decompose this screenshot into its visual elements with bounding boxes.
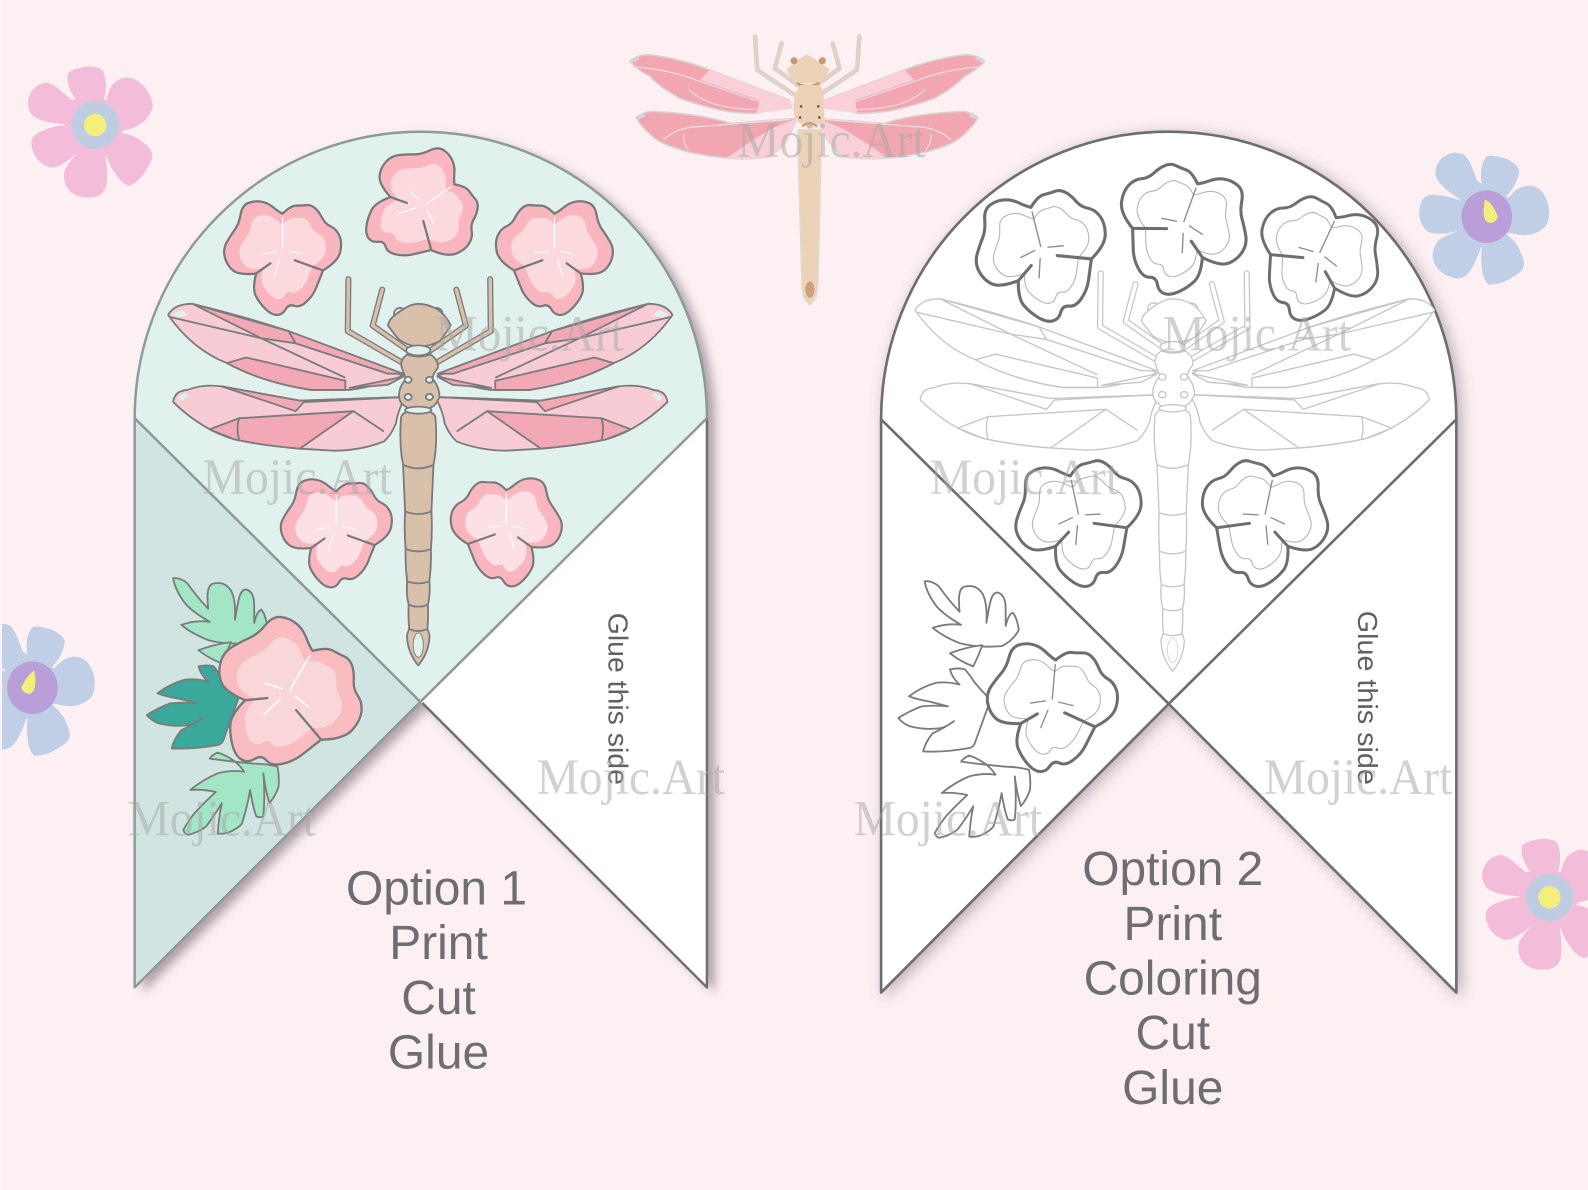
text: option 2 steps: Cut xyxy=(1136,1007,1210,1060)
leaves and flower on left flap xyxy=(147,578,385,835)
watermarks: Mojic.Art xyxy=(128,791,316,847)
watermarks: Mojic.Art xyxy=(203,449,392,505)
icon: pink flower top left xyxy=(28,66,153,197)
right flap upper edge xyxy=(420,418,707,702)
dragonfly illustration top centre xyxy=(629,36,985,306)
dragonfly line art xyxy=(915,273,1434,671)
text: glue this side: Glue this side xyxy=(1352,611,1383,785)
watermarks xyxy=(128,112,1452,847)
icon: blue flower top right xyxy=(1393,131,1565,306)
watermarks: Mojic.Art xyxy=(930,449,1119,505)
text: option 2 steps: Option 2 xyxy=(1082,843,1263,896)
panel: option 2 bookmark xyxy=(881,132,1456,1115)
watermarks: Mojic.Art xyxy=(537,749,725,805)
text: option 2 steps: Glue xyxy=(1122,1062,1223,1115)
panel: option 1 bookmark xyxy=(135,129,707,1079)
bookmark silhouette with shadow xyxy=(135,132,707,987)
flowers line art xyxy=(963,148,1399,598)
bookmark silhouette with shadow xyxy=(881,132,1456,993)
dragonfly coloured xyxy=(168,279,672,665)
icon: pink flower bottom right xyxy=(1482,839,1588,970)
text: option 1 steps: Option 1 xyxy=(346,862,527,915)
top arch face xyxy=(135,132,707,702)
fold lines xyxy=(881,419,1456,704)
text: glue this side: Glue this side xyxy=(603,613,634,785)
flowers on arch xyxy=(224,129,613,587)
icon: blue flower left edge xyxy=(0,602,111,777)
text: option 2 steps: Coloring xyxy=(1084,953,1262,1006)
big flower line art xyxy=(981,641,1122,778)
leaves and flower line art xyxy=(898,581,1030,838)
watermarks: Mojic.Art xyxy=(737,112,926,168)
watermarks: Mojic.Art xyxy=(1163,305,1351,361)
text: option 2 steps xyxy=(1082,843,1263,1115)
text: option 1 steps: Glue xyxy=(388,1026,489,1079)
text: option 1 steps: Print xyxy=(389,917,488,970)
right glue flap xyxy=(422,418,707,987)
watermarks: Mojic.Art xyxy=(435,305,624,361)
watermarks: Mojic.Art xyxy=(1264,749,1452,805)
text: option 2 steps: Print xyxy=(1124,898,1222,951)
page edge strip xyxy=(0,0,2,1190)
left folded flap xyxy=(135,418,420,987)
text: option 1 steps: Cut xyxy=(401,972,476,1025)
text: option 1 steps xyxy=(346,862,527,1079)
watermarks: Mojic.Art xyxy=(854,791,1042,847)
